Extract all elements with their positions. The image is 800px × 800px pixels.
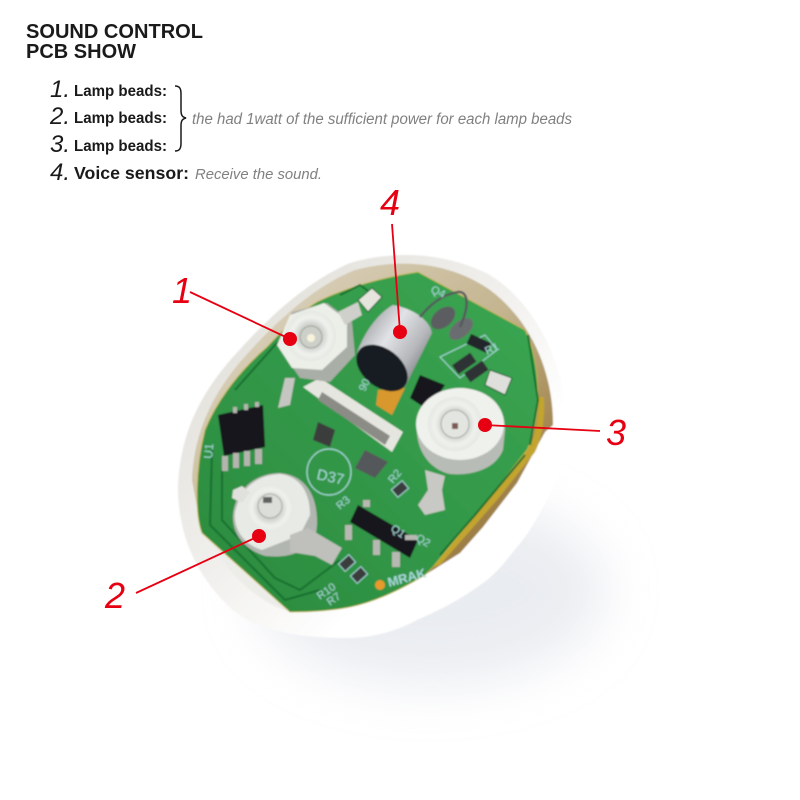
legend item 3: 3. xyxy=(50,131,70,158)
chip U1 xyxy=(218,402,265,471)
black diode xyxy=(410,375,445,410)
callout 3: 3 xyxy=(606,412,626,453)
legend item 3: Lamp beads: xyxy=(74,138,167,155)
small resistors R10 R7 xyxy=(338,481,409,583)
brace grouping lamp beads xyxy=(175,86,186,151)
transistor chips Q1 Q2 xyxy=(345,500,418,567)
legend item 1 xyxy=(50,76,167,103)
callout 2: 2 xyxy=(104,575,125,616)
silk labels: R7 xyxy=(325,591,343,608)
white dome shell xyxy=(178,255,567,638)
silk labels: 90 xyxy=(357,377,373,393)
LED 1 solder tab xyxy=(278,302,362,408)
silk labels: Q2 xyxy=(414,532,432,550)
LED bead 1 xyxy=(277,303,355,382)
callout 3 xyxy=(478,412,626,453)
lower left inner shell wall xyxy=(190,470,290,612)
solder pad top xyxy=(358,288,382,312)
silk label D37 xyxy=(307,449,351,495)
title: PCB SHOW xyxy=(26,41,136,63)
silk labels: R1 xyxy=(483,341,501,358)
silk labels: Q4 xyxy=(429,284,447,301)
microphone lead wire xyxy=(420,292,467,327)
callout 4 xyxy=(380,182,407,339)
soft shadow under dome xyxy=(255,495,605,685)
dark green copper traces xyxy=(210,285,538,600)
callout 4: 4 xyxy=(380,182,400,223)
legend item 2: 2. xyxy=(49,103,70,130)
orange flex tape xyxy=(376,388,405,415)
callout 2 xyxy=(104,529,266,616)
silk labels: Q1 xyxy=(388,523,407,541)
LED bead 3 xyxy=(416,388,505,474)
silk labels: R2 xyxy=(386,467,404,486)
beige inner rim xyxy=(192,264,553,612)
silk labels xyxy=(315,284,501,608)
silk label D37: D37 xyxy=(315,466,346,489)
callout 1: 1 xyxy=(172,270,192,311)
silk labels: R3 xyxy=(334,494,353,512)
LED 2 solder tab xyxy=(232,486,342,565)
gold board edge right xyxy=(433,397,544,567)
legend item 1: Lamp beads: xyxy=(74,83,167,100)
solder blobs near mic wire xyxy=(426,302,477,344)
legend list xyxy=(49,76,572,186)
resistor cluster xyxy=(440,334,512,395)
legend item 4 xyxy=(50,159,322,186)
legend item 4: 4. xyxy=(50,159,70,186)
slide switch component xyxy=(303,378,403,478)
photo of sound control PCB in dome xyxy=(178,255,567,638)
LED 3 solder tab xyxy=(418,470,445,515)
title xyxy=(26,21,203,63)
silk label U1: U1 xyxy=(201,442,216,459)
legend item 3 xyxy=(50,131,167,158)
LED bead 2 xyxy=(233,473,317,557)
legend item 4: Receive the sound. xyxy=(195,166,322,183)
legend item 4: Voice sensor: xyxy=(74,163,189,183)
legend item 1: 1. xyxy=(50,76,70,103)
legend item 2: Lamp beads: xyxy=(74,110,167,127)
lamp beads description: the had 1watt of the sufficient power for each lamp beads xyxy=(192,111,572,128)
MRAK mark with orange dot: MRAK xyxy=(386,565,428,590)
microphone voice sensor xyxy=(347,305,432,401)
legend item 2 xyxy=(49,103,167,130)
silk labels: R10 xyxy=(315,581,338,602)
title: SOUND CONTROL xyxy=(26,21,203,43)
callout 1 xyxy=(172,270,297,346)
green circuit board xyxy=(197,272,538,612)
